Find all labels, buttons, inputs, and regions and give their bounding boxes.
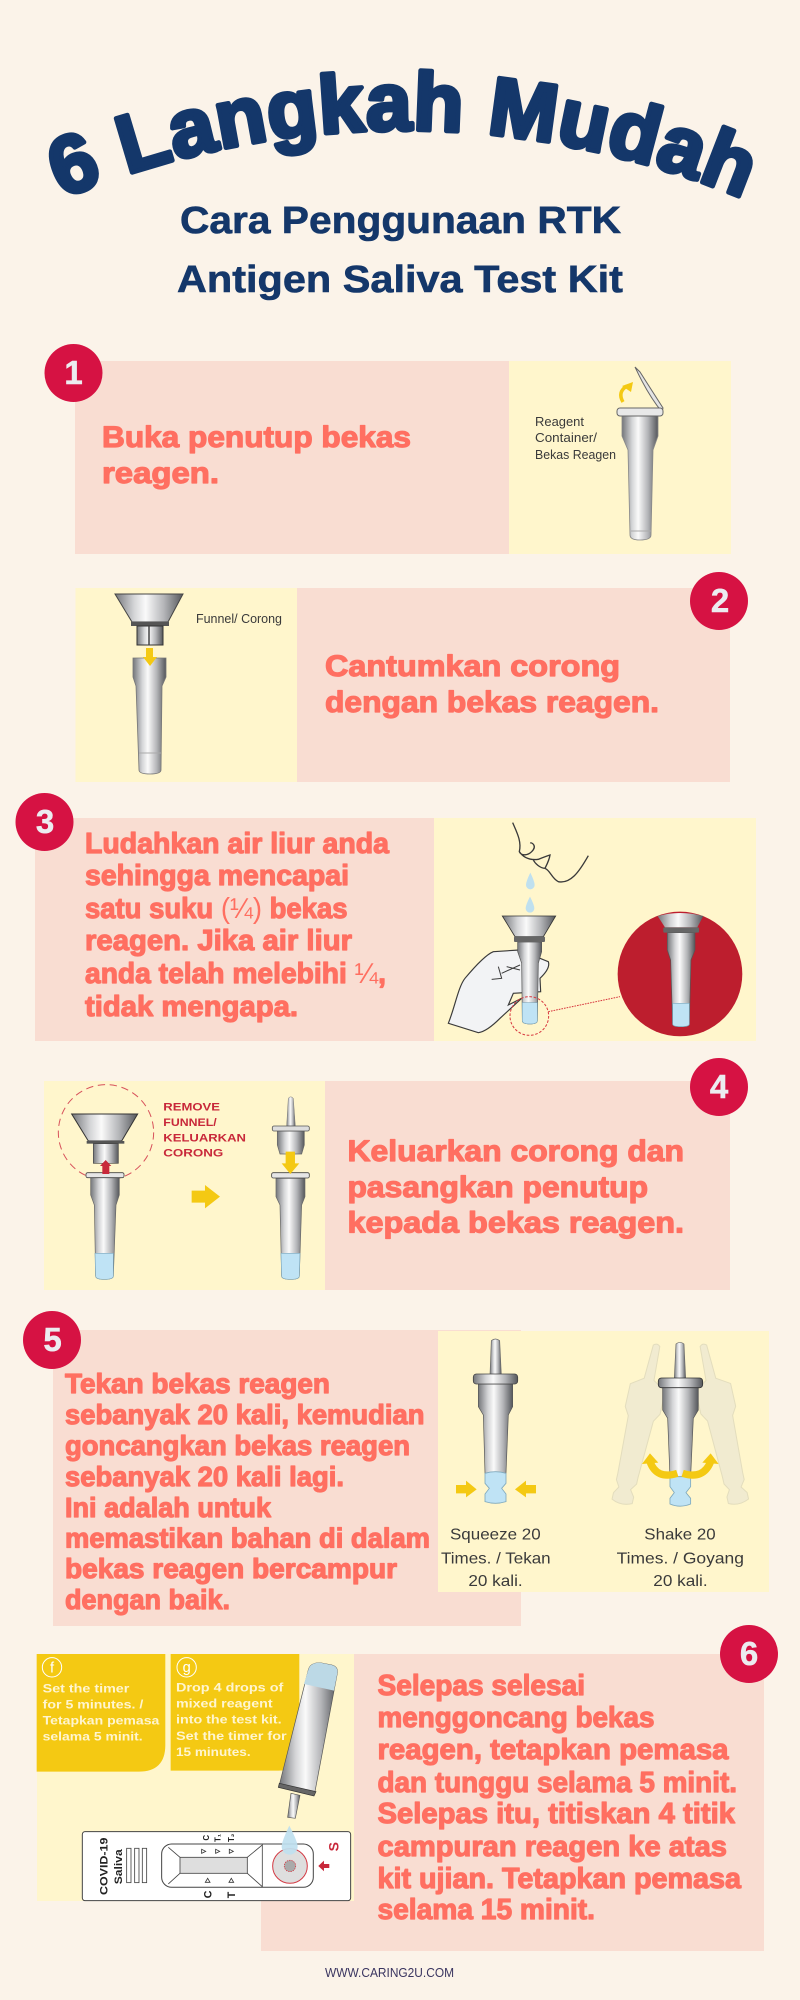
panel: step 4 — [44, 1058, 748, 1290]
step 6 text: dan tunggu selama 5 minit. — [378, 1767, 737, 1799]
callout: remove funnel label: REMOVE — [163, 1102, 220, 1114]
step 4 text — [348, 1135, 684, 1240]
step 5 text: sebanyak 20 kali lagi. — [65, 1461, 344, 1492]
panel: step 2 — [76, 572, 748, 782]
panel: step 3 — [16, 793, 756, 1041]
step 5 text: sebanyak 20 kali, kemudian — [65, 1399, 424, 1430]
step 2 text — [325, 650, 659, 719]
callout: instruction g: 15 minutes. — [176, 1745, 251, 1759]
icon: tube with cap — [272, 1097, 309, 1279]
step 1 label: Reagent — [535, 414, 584, 429]
step 5 number badge: 5 — [43, 1321, 62, 1358]
step 3 number badge: 3 — [36, 803, 54, 840]
callout: instruction g: Drop 4 drops of — [176, 1681, 285, 1695]
callout: remove funnel label: CORONG — [163, 1148, 223, 1160]
caption: shake: Shake 20 — [644, 1526, 716, 1543]
illustration: timer instructions and test kit — [37, 1654, 351, 1901]
illustration: replace funnel with cap — [58, 1085, 309, 1279]
callout: instruction g: Set the timer for — [176, 1729, 287, 1743]
callout: instruction f: Set the timer — [43, 1681, 130, 1695]
step 6 text: reagen, tetapkan pemasa — [378, 1734, 729, 1766]
panel: step 6 — [37, 1625, 778, 1951]
icon: test kit cassette: T₂ — [227, 1833, 236, 1842]
callout: instruction g: mixed reagent — [176, 1697, 273, 1711]
step 3 text: anda telah melebihi ¼, — [85, 958, 386, 990]
step 3 text: Ludahkan air liur anda — [85, 828, 390, 860]
callout: instruction f: Tetapkan pemasa — [43, 1714, 160, 1728]
callout: instruction g: into the test kit. — [176, 1713, 282, 1727]
step 6 text: campuran reagen ke atas — [378, 1831, 727, 1863]
icon: hand — [448, 950, 549, 1033]
step 6 text: selama 15 minit. — [378, 1894, 595, 1926]
icon: funnel above tube — [115, 594, 183, 774]
caption: shake: Times. / Goyang — [617, 1550, 744, 1567]
callout: remove funnel label: FUNNEL/ — [163, 1117, 217, 1129]
subtitle: Cara Penggunaan RTK — [180, 200, 622, 242]
icon: face profile — [513, 823, 588, 882]
step 2 number badge: 2 — [711, 582, 729, 619]
step 3 text — [85, 828, 390, 1023]
step 1 label: Bekas Reagen — [535, 447, 616, 462]
step 2 text: Cantumkan corong — [325, 650, 620, 683]
step 5 text: dengan baik. — [65, 1584, 230, 1615]
step 6 number badge — [720, 1625, 778, 1683]
callout: remove funnel label — [163, 1102, 246, 1160]
step 5 text — [65, 1368, 430, 1615]
step 3 text: tidak mengapa. — [85, 991, 298, 1023]
illustration: squeeze and shake — [441, 1339, 757, 1590]
step 1 text — [102, 421, 411, 490]
icon: dropper tube — [278, 1663, 337, 1818]
caption: squeeze — [441, 1526, 551, 1590]
step 4 text: kepada bekas reagen. — [348, 1206, 684, 1240]
subtitle: Antigen Saliva Test Kit — [177, 259, 623, 301]
icon: test kit cassette — [82, 1832, 351, 1901]
callout: remove funnel label: KELUARKAN — [163, 1133, 246, 1145]
step 4 number badge: 4 — [710, 1068, 729, 1105]
callout: instruction f: f — [50, 1661, 55, 1677]
caption: shake — [617, 1526, 744, 1590]
icon: faded shaking tubes — [604, 1340, 757, 1508]
step 6 text: Selepas selesai — [378, 1670, 585, 1702]
icon: open reagent tube — [617, 367, 663, 540]
icon: test kit cassette: C — [202, 1890, 214, 1898]
step 5 number badge — [23, 1311, 81, 1369]
step 6 text: kit ujian. Tetapkan pemasa — [378, 1863, 742, 1895]
illustration: spitting into funnel — [448, 823, 742, 1036]
step 1 label: Container/ — [535, 430, 597, 445]
step 4 number badge — [690, 1058, 748, 1116]
panel: step 5 — [23, 1311, 769, 1626]
icon: test kit cassette: S — [325, 1842, 341, 1851]
step 5 text: goncangkan bekas reagen — [65, 1430, 410, 1461]
caption: squeeze: Times. / Tekan — [441, 1550, 551, 1567]
step 6 text — [378, 1670, 742, 1926]
step 6 text: menggoncang bekas — [378, 1702, 654, 1734]
icon: tube with funnel — [502, 916, 556, 1024]
step 2 number badge — [690, 572, 748, 630]
callout: dashed zoom circle and line — [510, 997, 620, 1035]
step 1 text: Buka penutup bekas — [102, 421, 411, 454]
icon: test kit cassette: T — [226, 1891, 238, 1898]
icon: tube with funnel removed — [58, 1085, 154, 1279]
callout: instruction g — [171, 1654, 299, 1771]
icon: squeeze tube — [456, 1339, 536, 1503]
step 2 text: dengan bekas reagen. — [325, 686, 659, 719]
step 6 text: Selepas itu, titiskan 4 titik — [378, 1798, 736, 1830]
arrow: next — [192, 1185, 220, 1208]
footer url: WWW.CARING2U.COM — [325, 1965, 454, 1980]
caption: shake: 20 kali. — [653, 1573, 708, 1590]
step 5 text: Tekan bekas reagen — [65, 1368, 330, 1399]
step 4 text: Keluarkan corong dan — [348, 1135, 684, 1168]
caption: squeeze: 20 kali. — [468, 1573, 523, 1590]
step 3 text: satu suku (¼) bekas — [85, 893, 348, 925]
icon: saliva drops — [526, 873, 535, 913]
callout: instruction g: g — [183, 1660, 191, 1676]
step 2 label: Funnel/ Corong — [196, 611, 282, 626]
icon: test kit cassette: T₁ — [214, 1833, 223, 1842]
step 5 text: Ini adalah untuk — [65, 1492, 271, 1523]
icon: reagent drop — [282, 1826, 298, 1855]
caption: squeeze: Squeeze 20 — [450, 1526, 541, 1543]
step 6 number badge: 6 — [740, 1635, 758, 1672]
icon: magnified tube — [618, 912, 742, 1036]
step 1 number badge — [44, 344, 102, 402]
callout: instruction f: selama 5 minit. — [43, 1730, 143, 1744]
title: 6 Langkah Mudah — [48, 68, 753, 199]
arrow: shake motion — [642, 1453, 719, 1475]
step 1 label — [535, 414, 616, 462]
step 3 number badge — [16, 793, 74, 851]
step 5 text: bekas reagen bercampur — [65, 1553, 397, 1584]
step 5 text: memastikan bahan di dalam — [65, 1522, 430, 1554]
callout: instruction f: for 5 minutes. / — [43, 1698, 144, 1712]
step 3 text: reagen. Jika air liur — [85, 925, 352, 957]
icon: test kit cassette: Saliva — [113, 1849, 125, 1884]
step 1 number badge: 1 — [64, 354, 83, 391]
icon: test kit cassette: C — [202, 1835, 211, 1841]
icon: test kit cassette: COVID-19 — [99, 1838, 111, 1895]
subtitle — [177, 200, 623, 301]
step 4 text: pasangkan penutup — [348, 1171, 648, 1204]
step 1 text: reagen. — [102, 457, 219, 490]
callout: instruction f — [37, 1654, 165, 1772]
step 3 text: sehingga mencapai — [85, 860, 349, 892]
icon: shake tube — [658, 1342, 703, 1506]
panel: step 1 — [44, 344, 731, 554]
